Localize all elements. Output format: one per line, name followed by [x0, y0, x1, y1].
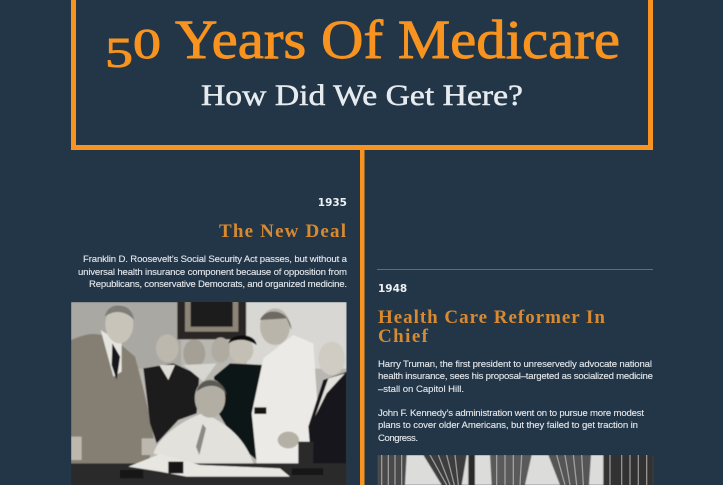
text block: Kennedy: [378, 408, 644, 444]
heading: Health Care Reformer In Chief: [378, 307, 605, 347]
heading: Health Care Reformer In Chief: Chief: [378, 326, 429, 347]
timeline spine: [360, 148, 364, 485]
photo: Truman era curtains: [378, 455, 653, 485]
text block: Truman: Harry Truman, the first president to unreservedly advocate national: [378, 359, 652, 370]
heading: Health Care Reformer In Chief: Health Care Reformer In: [378, 307, 605, 328]
text block: Truman: [378, 359, 653, 395]
photo: Roosevelt signing the Social Security Act: [71, 300, 347, 485]
subtitle: How Did We Get Here?: [201, 79, 523, 112]
text block: New Deal description: universal health insurance component because of opposition from: [78, 267, 347, 278]
text block: Kennedy: plans to cover older Americans, but they failed to get traction in: [378, 420, 638, 431]
section: 1935 The New Deal: [71, 197, 348, 485]
title: 5: [105, 31, 133, 77]
title: 0: [133, 22, 161, 68]
text block: Kennedy: John F. Kennedy’s administration went on to pursue more modest: [378, 408, 644, 419]
text block: Truman: –stall on Capitol Hill.: [378, 384, 464, 395]
text block: Truman: health insurance, sees his proposal–targeted as socialized medicine: [378, 371, 653, 382]
title: Years Of Medicare: [175, 9, 620, 70]
divider: [377, 269, 653, 270]
heading: The New Deal: The New Deal: [219, 221, 346, 242]
title frame: [74, 0, 650, 148]
text block: New Deal description: Franklin D. Roosevelt’s Social Security Act passes, but without a: [83, 254, 348, 265]
section: 1948 Health Care Reformer In Chief: [378, 283, 653, 485]
year 1948: 1948: [378, 283, 407, 295]
year 1935: 1935: [318, 197, 347, 209]
text block: New Deal description: [78, 254, 348, 290]
text block: Kennedy: Congress.: [378, 433, 418, 444]
text block: New Deal description: Republicans, conservative Democrats, and organized medicine.: [89, 279, 347, 290]
